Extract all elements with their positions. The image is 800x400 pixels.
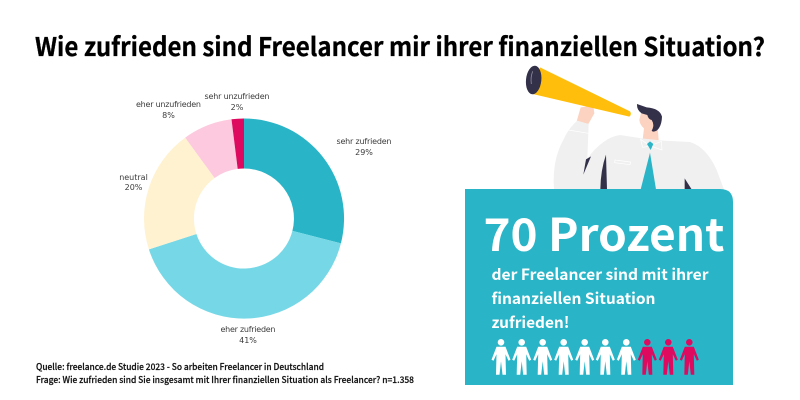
slice: sehr zufrieden (244, 118, 344, 243)
title: Wie zufrieden sind Freelancer mir ihrer finanziellen Situation? (35, 27, 765, 64)
illustration: man with telescope (525, 65, 724, 189)
label: sehr unzufrieden: sehr unzufrieden (204, 92, 270, 101)
callout text: der Freelancer sind mit ihrer (492, 263, 709, 285)
hair (637, 104, 662, 132)
big number: 70 Prozent (484, 199, 725, 264)
slice: eher unzufrieden (185, 119, 238, 178)
callout text: finanziellen Situation (492, 287, 656, 309)
label: sehr zufrieden: 29% (355, 148, 373, 157)
source note: Quelle: freelance.de Studie 2023 - So arbeiten Freelancer in Deutschland (36, 360, 324, 373)
panel: 70 percent callout (465, 189, 733, 385)
donut chart (144, 118, 344, 319)
lens highlight (531, 71, 533, 84)
source note: Frage: Wie zufrieden sind Sie insgesamt mit Ihrer finanziellen Situation als Freelancer? n=1.358 (36, 373, 414, 386)
shirt shadows (583, 155, 692, 189)
neck and face (639, 110, 659, 140)
label: sehr unzufrieden: 2% (231, 103, 244, 112)
slice: sehr unzufrieden (232, 118, 244, 169)
panel background (465, 189, 733, 385)
label: sehr zufrieden: sehr zufrieden (336, 137, 392, 146)
callout text: zufrieden! (492, 311, 570, 333)
telescope lens (525, 65, 543, 95)
hand (577, 101, 594, 124)
slice: eher zufrieden (149, 231, 341, 319)
icon row: 7 of 10 people satisfied (492, 339, 699, 375)
slice: neutral (144, 138, 215, 249)
label: neutral: neutral (119, 173, 148, 182)
label: neutral: 20% (125, 183, 143, 192)
label: eher unzufrieden: eher unzufrieden (136, 100, 201, 109)
label: eher zufrieden: 41% (239, 336, 257, 345)
label: eher zufrieden: eher zufrieden (220, 325, 276, 334)
shirt (554, 121, 724, 189)
shirt sleeve and collar lines (568, 130, 662, 165)
telescope tube (533, 67, 631, 117)
tie (641, 141, 656, 189)
label: eher unzufrieden: 8% (162, 111, 175, 120)
